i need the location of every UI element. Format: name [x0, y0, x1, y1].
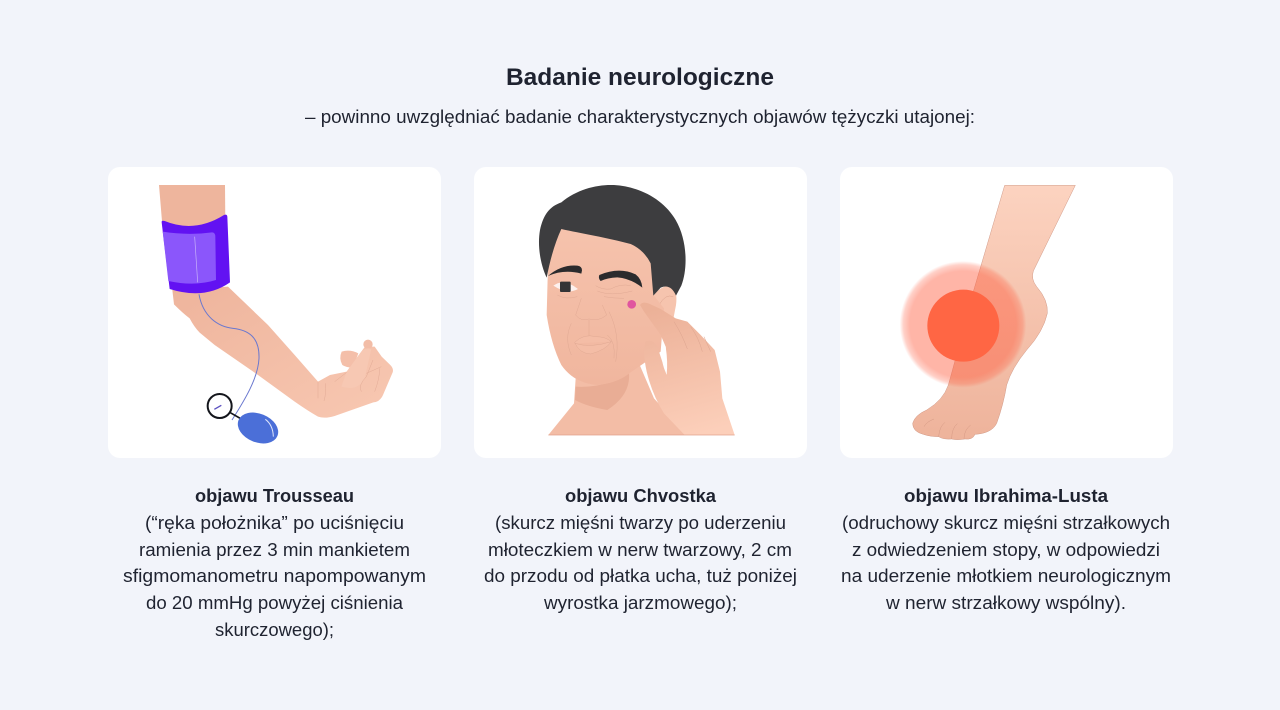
illustration: arm with blood pressure cuff — [159, 185, 393, 449]
mouth — [575, 336, 611, 354]
bulb highlight — [265, 419, 273, 437]
leg and foot — [913, 185, 1075, 440]
gauge — [208, 394, 232, 418]
fingertip — [363, 340, 373, 349]
subtitle: – powinno uwzględniać badanie charakterystycznych objawów tężyczki utajonej: — [305, 107, 975, 127]
illustration: foot with glow — [900, 185, 1075, 440]
forearm and hand — [172, 287, 393, 418]
gap between thumb and finger — [662, 347, 667, 374]
panel: objaw Chvostka — [474, 167, 807, 613]
description: ramienia przez 3 min mankietem — [139, 540, 410, 560]
base line — [548, 434, 735, 436]
toes — [924, 419, 971, 439]
tube — [199, 294, 259, 420]
panel: objaw Trousseau — [108, 167, 441, 640]
description: (skurcz mięśni twarzy po uderzeniu — [495, 513, 786, 533]
face — [547, 222, 664, 385]
card background — [840, 167, 1173, 458]
ear line — [659, 296, 673, 305]
iris — [560, 282, 571, 292]
description: objawu Chvostka — [565, 486, 717, 506]
description: wyrostka jarzmowego); — [543, 593, 737, 613]
palm creases — [318, 360, 381, 401]
glow — [900, 261, 1026, 388]
card background — [474, 167, 807, 458]
neck and shoulders — [548, 352, 687, 435]
description: objawu Trousseau — [195, 486, 354, 506]
index finger — [340, 351, 358, 368]
description: (odruchowy skurcz mięśni strzałkowych — [842, 513, 1170, 533]
cuff panel — [163, 232, 216, 284]
title: Badanie neurologiczne — [506, 64, 774, 91]
card background — [108, 167, 441, 458]
cuff — [162, 215, 230, 293]
left eye — [553, 282, 578, 291]
description: na uderzenie młotkiem neurologicznym — [841, 566, 1171, 586]
description: (“ręka położnika” po uciśnięciu — [145, 513, 404, 533]
description: do przodu od płatka ucha, tuż poniżej — [484, 566, 797, 586]
nerve point — [927, 290, 999, 362]
thumb — [341, 348, 371, 388]
description: z odwiedzeniem stopy, w odpowiedzi — [852, 540, 1160, 560]
hand — [640, 303, 735, 435]
left eyebrow — [548, 266, 582, 276]
description: młoteczkiem w nerw twarzowy, 2 cm — [488, 540, 792, 560]
neck shadow — [575, 373, 629, 410]
panel: objaw Ibrahima-Lusta — [840, 167, 1173, 613]
description: do 20 mmHg powyżej ciśnienia — [146, 593, 404, 613]
description: skurczowego); — [215, 620, 334, 640]
description: objawu Ibrahima-Lusta — [904, 486, 1109, 506]
right eyebrow — [599, 271, 642, 288]
description: w nerw strzałkowy wspólny). — [885, 593, 1126, 613]
description — [841, 486, 1171, 613]
description: sfigmomanometru napompowanym — [123, 566, 426, 586]
cuff seam — [195, 237, 198, 282]
bulb — [233, 407, 283, 449]
pink tap point — [627, 300, 636, 309]
gauge connector — [230, 412, 241, 419]
description — [123, 486, 426, 640]
ear — [653, 286, 676, 319]
illustration: face with finger tap — [539, 185, 735, 435]
upper arm — [159, 185, 225, 233]
hair — [539, 185, 686, 296]
finger lines — [674, 322, 711, 352]
description — [484, 486, 797, 613]
wrinkles — [557, 285, 632, 362]
gauge needle — [214, 405, 221, 409]
